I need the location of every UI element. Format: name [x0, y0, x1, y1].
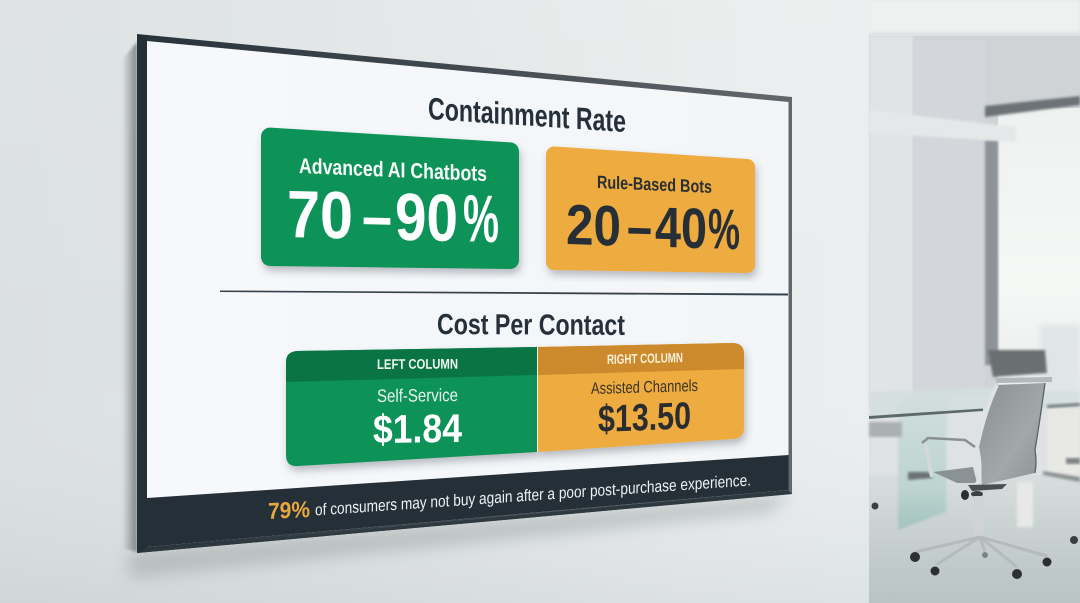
column header — [538, 343, 744, 375]
card value — [566, 193, 740, 262]
glass table top — [869, 388, 1080, 418]
headrest — [988, 350, 1047, 377]
distant skyline — [1040, 325, 1080, 395]
column value: $1.84 — [373, 407, 463, 452]
heading: Containment Rate: Containment Rate — [428, 91, 626, 139]
pendant light — [869, 110, 1016, 142]
column label: Self-Service — [377, 385, 458, 406]
stem — [974, 496, 984, 538]
footer statistic text — [268, 471, 751, 524]
card: Rule-Based Bots — [554, 154, 747, 265]
card background — [554, 154, 747, 265]
card value: 40 — [655, 196, 707, 261]
office background scene — [869, 0, 1080, 603]
card value — [287, 177, 499, 257]
card label: Advanced AI Chatbots — [299, 154, 487, 186]
display frame — [137, 34, 792, 553]
top bar — [995, 377, 1052, 383]
window mullion — [985, 140, 998, 365]
column value: $13.50 — [598, 395, 691, 441]
display shadow on wall — [122, 42, 792, 578]
floor reflection — [1017, 482, 1033, 527]
header label: RIGHT COLUMN — [607, 350, 683, 367]
casters — [910, 552, 1052, 579]
glass leg — [898, 388, 947, 530]
heading: Cost Per Contact: Cost Per Contact — [437, 309, 625, 342]
mechanism — [968, 484, 1007, 491]
card: Advanced AI Chatbots — [270, 137, 510, 260]
card value: 70 — [287, 177, 353, 254]
column: Assisted Channels — [538, 343, 744, 452]
left arm pad — [908, 472, 933, 480]
card label: Rule-Based Bots — [597, 172, 712, 197]
floor — [869, 475, 1080, 603]
card value: 90 — [395, 180, 458, 256]
card background — [270, 137, 510, 260]
column: Self-Service — [286, 347, 537, 466]
column body — [538, 343, 744, 452]
card value: % — [463, 181, 499, 257]
header label: LEFT COLUMN — [377, 356, 458, 372]
office chair — [908, 350, 1052, 579]
column label: Assisted Channels — [591, 377, 698, 398]
card value: 20 — [566, 193, 621, 259]
table edge — [869, 408, 983, 419]
section divider — [220, 290, 788, 296]
footer bar — [147, 455, 788, 547]
seat pad — [933, 467, 977, 483]
armrest — [922, 438, 975, 447]
table: cost per contact — [286, 343, 744, 466]
backrest — [977, 383, 1045, 485]
arm support — [925, 443, 932, 477]
column header — [286, 347, 537, 382]
ceiling fixture bar — [985, 96, 1080, 117]
backrest chrome — [975, 385, 997, 487]
star base — [915, 537, 1047, 567]
highlighted figure: 79% — [268, 496, 310, 524]
background chair caster — [872, 502, 1078, 544]
far furniture — [1047, 408, 1080, 478]
statement: of consumers may not buy again after a poor post-purchase experience. — [315, 471, 751, 519]
card value: – — [627, 195, 652, 260]
card value: – — [362, 179, 392, 255]
window — [998, 108, 1080, 403]
far shelf — [869, 422, 902, 437]
backrest right edge — [1035, 383, 1045, 473]
card value: % — [708, 197, 740, 262]
screen background — [147, 41, 788, 547]
column separator — [536, 347, 538, 452]
column body — [286, 347, 537, 466]
